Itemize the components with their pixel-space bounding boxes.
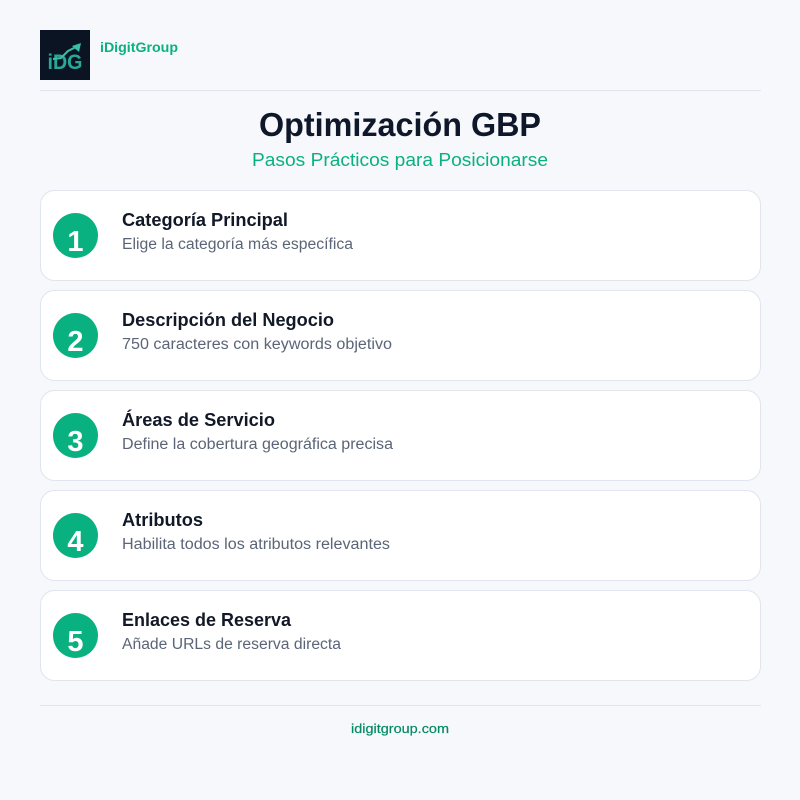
step 5 description: Añade URLs de reserva directa — [122, 636, 341, 653]
number badge 1: 1 — [67, 226, 84, 258]
brand name: iDigitGroup — [100, 39, 178, 55]
header — [40, 30, 178, 80]
number badge 5: 5 — [67, 626, 84, 658]
number badge 3 — [53, 413, 98, 458]
step 4 description: Habilita todos los atributos relevantes — [122, 536, 390, 553]
step 2 title: Descripción del Negocio — [122, 310, 334, 330]
step card 2 — [40, 290, 760, 380]
step 1 description: Elige la categoría más específica — [122, 236, 353, 253]
number badge 5 — [53, 613, 98, 658]
title: Optimización GBP — [259, 106, 541, 143]
step 2 description: 750 caracteres con keywords objetivo — [122, 336, 392, 353]
number badge 1 — [53, 213, 98, 258]
number badge 4: 4 — [67, 526, 84, 558]
step card 1 — [40, 190, 760, 280]
step 3 title: Áreas de Servicio — [122, 409, 275, 430]
number badge 4 — [53, 513, 98, 558]
logo: iDG — [48, 51, 82, 74]
step card 5 — [40, 590, 760, 680]
number badge 2 — [53, 313, 98, 358]
step 3 description: Define la cobertura geográfica precisa — [122, 436, 393, 453]
footer url: idigitgroup.com — [351, 721, 449, 736]
step 4 title: Atributos — [122, 510, 203, 530]
step 1 title: Categoría Principal — [122, 210, 288, 230]
step card 4 — [40, 490, 760, 580]
number badge 2: 2 — [67, 326, 84, 358]
number badge 3: 3 — [67, 426, 84, 458]
step 5 title: Enlaces de Reserva — [122, 610, 292, 630]
subtitle: Pasos Prácticos para Posicionarse — [252, 149, 548, 170]
step card 3 — [40, 390, 760, 480]
